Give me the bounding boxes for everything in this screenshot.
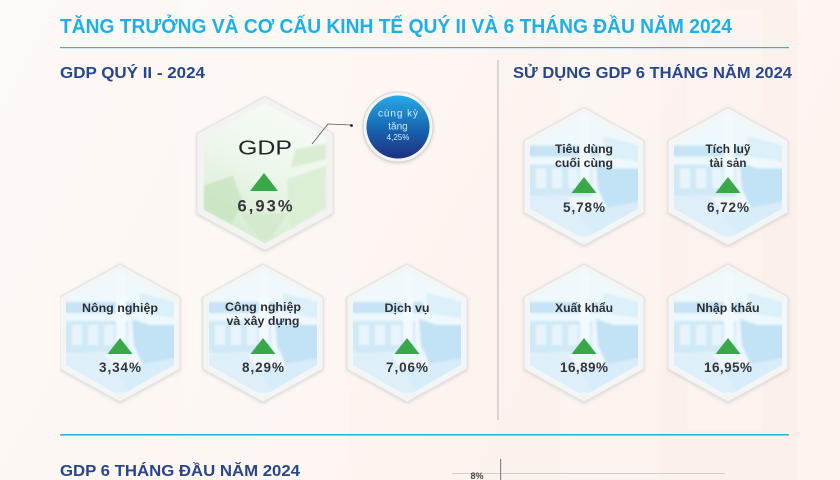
hexagon: Công nghiệp và xây dựng: và xây dựng [226, 316, 300, 328]
hexagon: Tích luỹ tài sản: tài sản [710, 158, 746, 170]
title: TĂNG TRƯỞNG VÀ CƠ CẤU KINH TẾ QUÝ II VÀ 6 THÁNG ĐẦU NĂM 2024 [60, 14, 733, 38]
callout: cùng kỳ tăng 4,25%: cùng kỳ [378, 108, 418, 120]
hexagon: Nhập khẩu [668, 263, 788, 403]
hexagon: Nông nghiệp: 3,34% [99, 360, 141, 375]
hexagon: Nhập khẩu: Nhập khẩu [696, 303, 760, 315]
hexagon: Nông nghiệp [60, 263, 180, 403]
hexagon: GDP [197, 96, 333, 250]
hexagon: Tích luỹ tài sản: Tích luỹ [705, 144, 751, 156]
arrow up [250, 173, 278, 191]
hexagon: Tiêu dùng cuối cùng: Tiêu dùng [555, 144, 613, 156]
hexagon: Nhập khẩu: 16,95% [704, 360, 752, 375]
hexagon: Dịch vụ [347, 263, 467, 403]
heading: sử dụng GDP: SỬ DỤNG GDP 6 THÁNG NĂM 2024 [513, 64, 792, 82]
hexagon: Xuất khẩu: 16,89% [560, 360, 608, 375]
callout: cùng kỳ tăng 4,25%: 4,25% [387, 133, 409, 142]
heading: GDP quý II: GDP QUÝ II - 2024 [60, 64, 205, 82]
hexagon: Tiêu dùng cuối cùng [524, 106, 644, 246]
hexagon: Xuất khẩu: Xuất khẩu [555, 303, 613, 315]
hexagon: Tiêu dùng cuối cùng: cuối cùng [555, 158, 613, 170]
hexagon: Tích luỹ tài sản [668, 106, 788, 246]
hexagon: Tích luỹ tài sản: 6,72% [707, 200, 749, 215]
hexagon: Tiêu dùng cuối cùng: 5,78% [563, 200, 605, 215]
hexagon: Dịch vụ: 7,06% [386, 360, 428, 375]
heading: GDP 6 tháng: GDP 6 THÁNG ĐẦU NĂM 2024 [60, 463, 300, 480]
hexagon: Công nghiệp và xây dựng [203, 263, 323, 403]
hexagon: Dịch vụ: Dịch vụ [384, 303, 430, 315]
hexagon: Công nghiệp và xây dựng: Công nghiệp [225, 302, 301, 314]
hexagon: Công nghiệp và xây dựng: 8,29% [242, 360, 284, 375]
callout: cùng kỳ tăng 4,25% [363, 92, 433, 162]
callout line [312, 124, 353, 144]
label: GDP [238, 138, 292, 160]
value: 6,93% [238, 198, 293, 216]
callout: cùng kỳ tăng 4,25%: tăng [388, 122, 408, 132]
hexagon: Xuất khẩu [524, 263, 644, 403]
hexagon: Nông nghiệp: Nông nghiệp [82, 303, 158, 315]
